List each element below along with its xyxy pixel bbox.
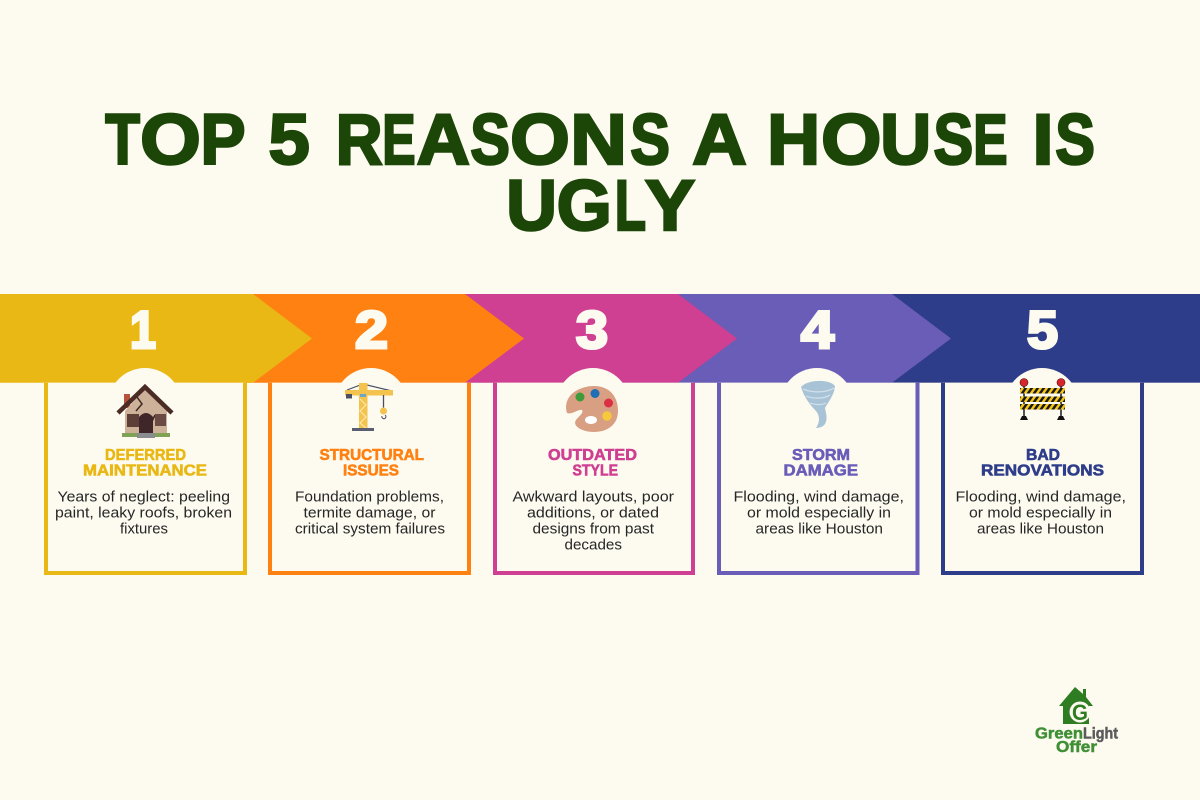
title: E <box>973 101 1008 180</box>
description: paint, leaky roofs, broken <box>55 505 232 522</box>
description <box>295 489 445 538</box>
title: S <box>470 101 510 180</box>
icon: road barricade <box>1020 378 1065 420</box>
title: R <box>336 101 383 180</box>
heading: DEFERRED <box>105 447 186 464</box>
arrow 1 <box>0 294 312 383</box>
heading: RENOVATIONS <box>981 463 1104 480</box>
description: critical system failures <box>295 521 445 538</box>
heading: DAMAGE <box>784 463 858 480</box>
title: E <box>382 101 416 180</box>
description: areas like Houston <box>756 521 883 538</box>
description: fixtures <box>120 521 168 538</box>
description <box>956 489 1126 538</box>
title: U <box>880 101 931 180</box>
heading: STRUCTURAL <box>320 447 424 464</box>
title: S <box>630 101 670 180</box>
panel: bad renovations <box>943 368 1142 573</box>
title: U <box>506 167 557 246</box>
description: Foundation problems, <box>295 489 444 506</box>
title: S <box>1055 101 1095 180</box>
description: Years of neglect: peeling <box>58 489 230 506</box>
panel: storm damage <box>719 368 918 573</box>
title: O <box>510 101 570 180</box>
panel: outdated style <box>495 368 693 573</box>
arrow band <box>0 294 1200 383</box>
heading: MAINTENANCE <box>83 463 207 480</box>
title: P <box>200 101 244 180</box>
icon: paint palette <box>566 386 618 432</box>
title: H <box>767 101 820 180</box>
logo: GreenLight Offer: Light <box>1083 726 1119 742</box>
panel: deferred maintenance <box>46 368 245 573</box>
description: termite damage, or <box>304 505 436 522</box>
title: N <box>570 101 627 180</box>
description: Flooding, wind damage, <box>734 489 904 506</box>
title: A <box>692 101 745 180</box>
title: A <box>417 101 470 180</box>
description: Flooding, wind damage, <box>956 489 1126 506</box>
description: additions, or dated <box>527 505 659 522</box>
heading: OUTDATED <box>548 447 637 464</box>
title: S <box>934 101 973 180</box>
arrow 5: 5 <box>1027 301 1058 360</box>
description <box>512 489 674 554</box>
title: O <box>821 101 882 180</box>
description: or mold especially in <box>747 505 891 522</box>
logo: GreenLight Offer: Offer <box>1056 739 1097 756</box>
title: L <box>615 167 646 246</box>
heading <box>320 447 424 480</box>
description: designs from past <box>532 521 655 538</box>
arrow 4 <box>600 294 951 383</box>
icon: broken house <box>118 387 172 438</box>
description: decades <box>564 537 622 554</box>
logo: GreenLight Offer: Green <box>1035 726 1083 742</box>
logo: GreenLight Offer <box>1035 687 1119 756</box>
title <box>105 101 1095 246</box>
heading <box>83 447 207 480</box>
logo: GreenLight Offer: G <box>1072 700 1088 725</box>
heading: STORM <box>792 447 850 464</box>
description: areas like Houston <box>977 521 1104 538</box>
heading <box>548 447 637 480</box>
description <box>734 489 904 538</box>
description: or mold especially in <box>969 505 1112 522</box>
title: O <box>140 101 201 180</box>
heading: ISSUES <box>343 463 399 480</box>
icon: construction crane <box>345 383 393 431</box>
arrow 3 <box>400 294 737 383</box>
arrow 3: 3 <box>576 301 608 360</box>
description <box>55 489 232 538</box>
title: T <box>105 101 140 180</box>
icon: tornado <box>801 381 835 428</box>
heading <box>981 447 1104 480</box>
heading: BAD <box>1026 447 1060 464</box>
title: 5 <box>268 101 310 180</box>
description: Awkward layouts, poor <box>512 489 674 506</box>
title: I <box>1032 101 1054 180</box>
arrow 1: 1 <box>130 301 156 360</box>
arrow 2 <box>200 294 524 383</box>
arrow 4: 4 <box>801 301 835 360</box>
title: G <box>557 167 612 246</box>
arrow 2: 2 <box>355 301 388 360</box>
arrow 5 <box>800 294 1200 383</box>
heading: STYLE <box>572 463 618 480</box>
panel: structural issues <box>270 368 469 573</box>
title: Y <box>645 167 695 246</box>
heading <box>784 447 858 480</box>
